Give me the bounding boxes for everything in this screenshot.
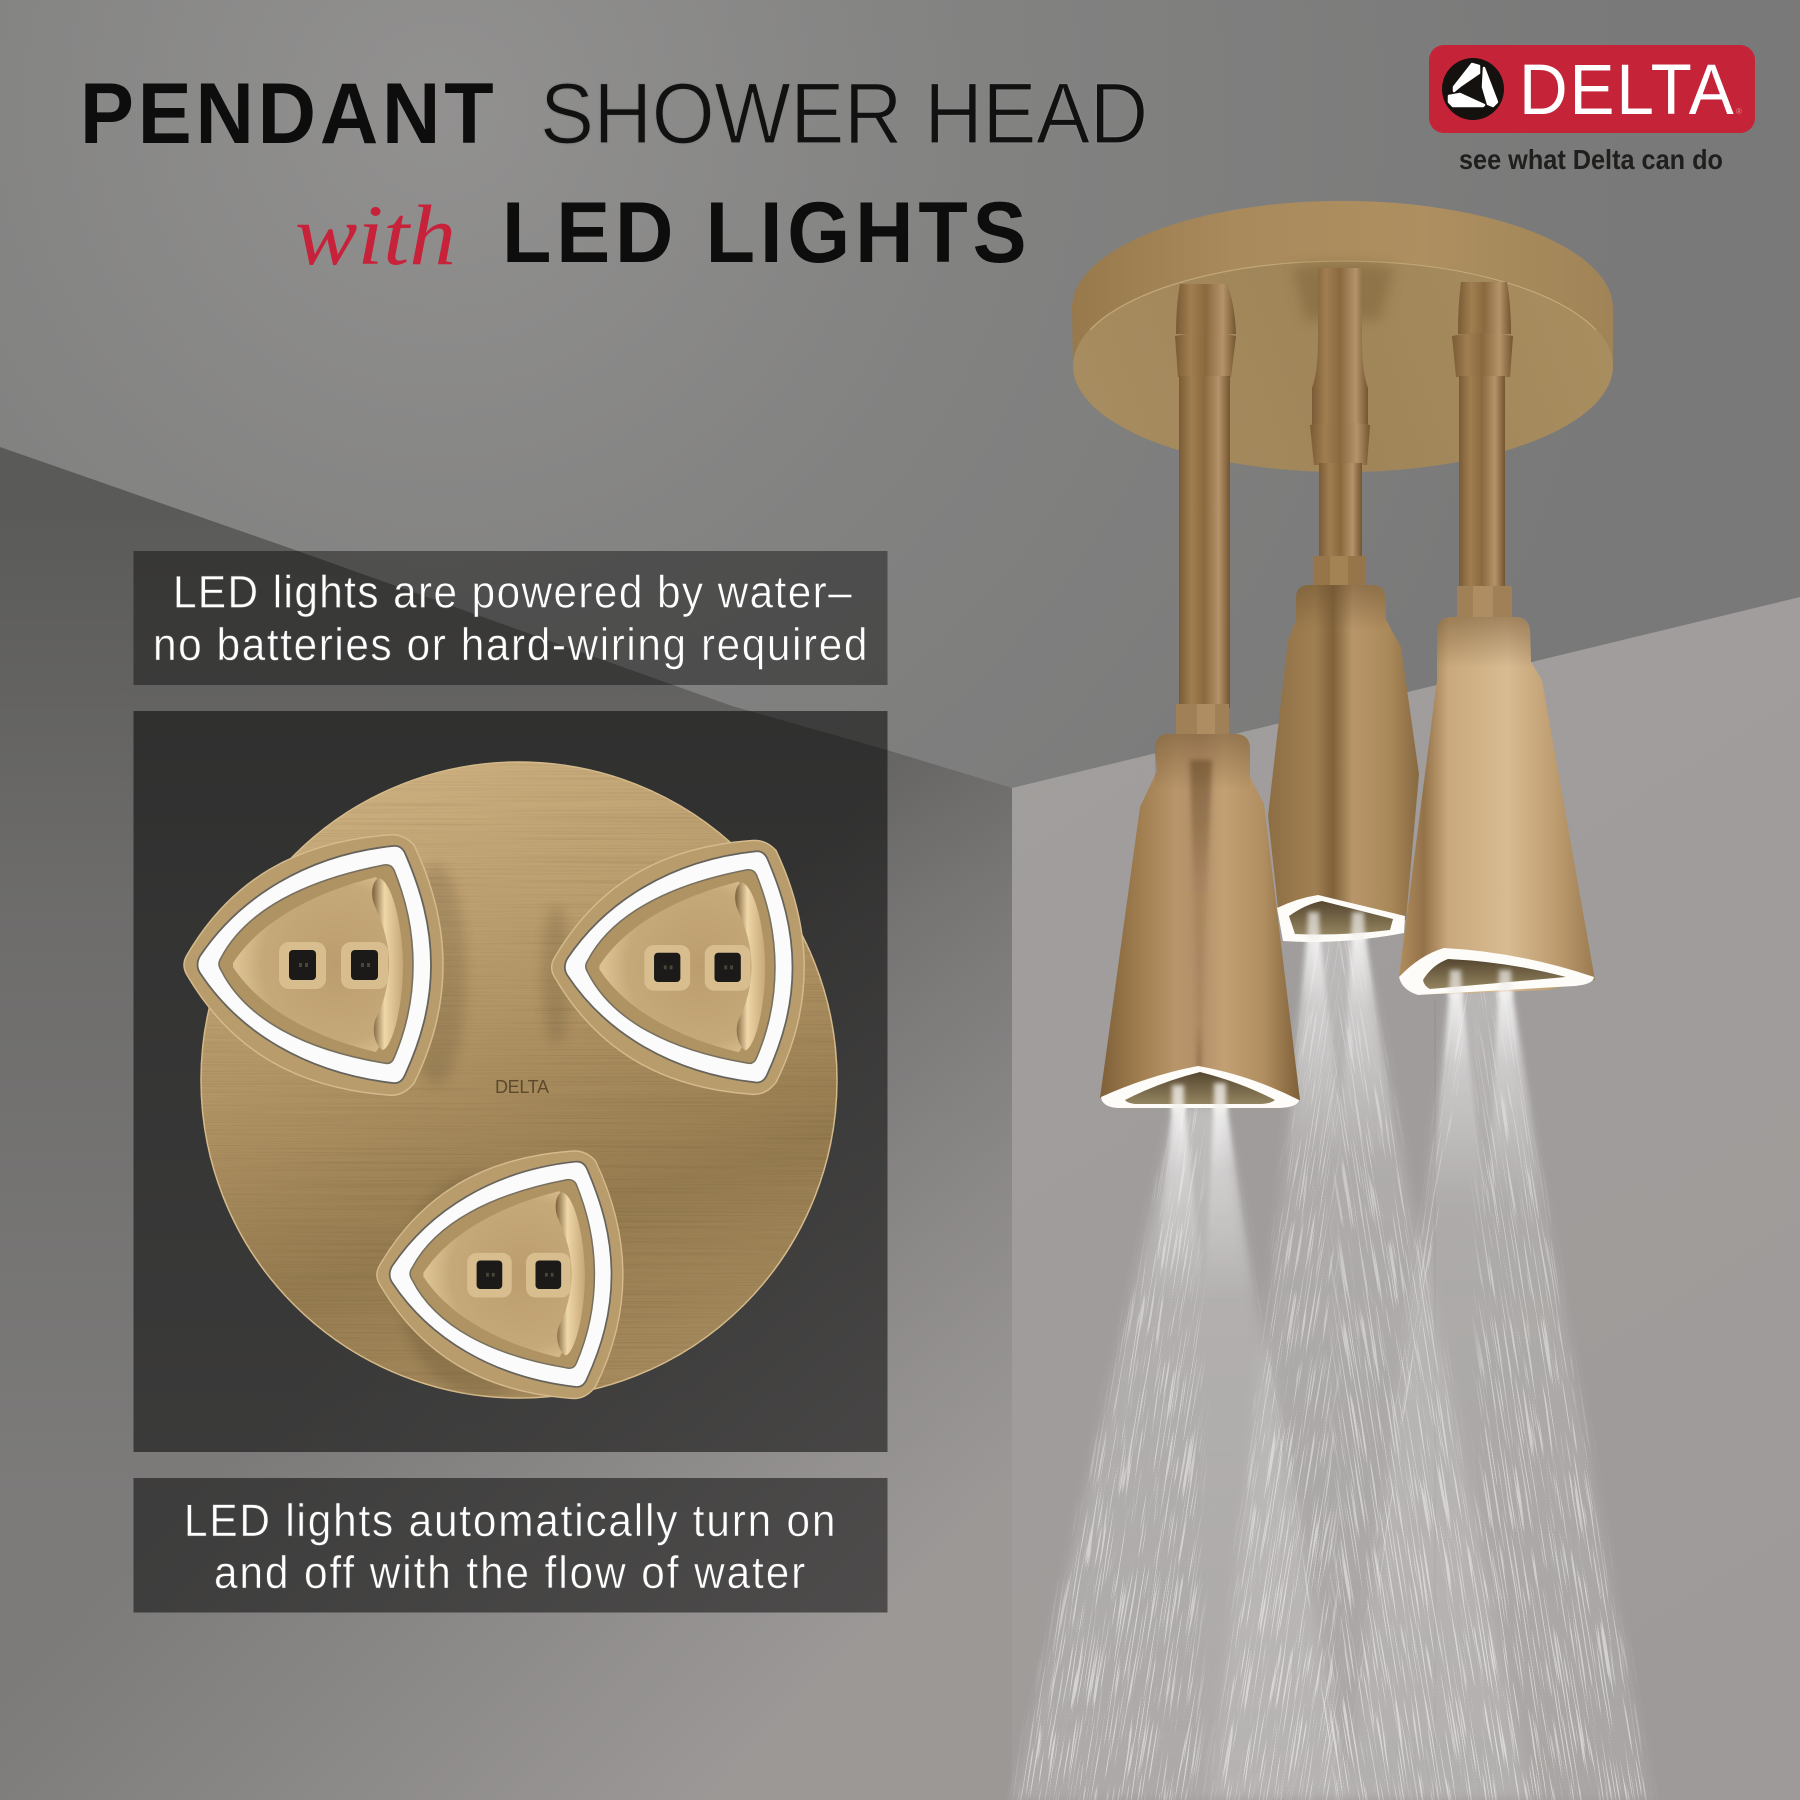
caption line 1: LED lights are powered by water– bbox=[173, 567, 852, 618]
nozzle jets over lens bbox=[1172, 912, 1512, 1112]
shadows under triangles bbox=[400, 865, 570, 1395]
logo tagline: see what Delta can do bbox=[1459, 144, 1723, 175]
title word: with: with bbox=[295, 187, 456, 283]
plate brand mark: DELTA bbox=[495, 1077, 549, 1097]
title bbox=[80, 65, 1148, 283]
caption line 2: no batteries or hard-wiring required bbox=[153, 620, 867, 670]
caption line 2: and off with the flow of water bbox=[214, 1548, 805, 1598]
left head LED ring bbox=[1101, 1066, 1299, 1108]
back pendant arm bbox=[1310, 268, 1370, 585]
back head LED ring bbox=[1277, 895, 1405, 942]
right pendant arm bbox=[1452, 282, 1513, 617]
round brushed plate bbox=[200, 760, 840, 1400]
jets bbox=[1154, 925, 1546, 1300]
panel: LED close-up bbox=[134, 711, 888, 1452]
title words: SHOWER HEAD: SHOWER HEAD bbox=[540, 65, 1148, 162]
right wall bbox=[1012, 597, 1800, 1800]
ceiling mount plate bbox=[1072, 201, 1613, 472]
left pendant head bbox=[1100, 734, 1300, 1108]
caption box bbox=[134, 551, 888, 685]
caption line 1: LED lights automatically turn on bbox=[184, 1496, 835, 1546]
logo red badge bbox=[1429, 45, 1755, 133]
shower head product bbox=[1072, 201, 1613, 1112]
logo: Delta bbox=[1429, 45, 1755, 175]
left pendant arm bbox=[1175, 284, 1236, 735]
title words: LED LIGHTS: LED LIGHTS bbox=[502, 184, 1027, 281]
caption box bbox=[134, 1478, 888, 1612]
spray face: left bbox=[184, 835, 443, 1095]
left wall bbox=[0, 447, 1012, 1800]
right pendant head bbox=[1399, 617, 1595, 995]
soft fans of mist bbox=[1013, 930, 1650, 1800]
title word: PENDANT: PENDANT bbox=[80, 65, 494, 162]
registered mark: ® bbox=[1736, 107, 1742, 116]
water streaks leaning right bbox=[1254, 940, 1652, 1800]
back pendant head bbox=[1268, 585, 1419, 942]
caption: automatic on and off bbox=[134, 1478, 888, 1612]
logo wordmark: DELTA bbox=[1519, 49, 1734, 129]
spray face: bottom bbox=[377, 1151, 623, 1398]
caption: powered by water bbox=[134, 551, 888, 685]
right head LED ring bbox=[1399, 948, 1594, 995]
water streaks leaning left bbox=[1005, 900, 1487, 1800]
water spray bbox=[1005, 900, 1677, 1800]
spray face: right bbox=[552, 840, 804, 1094]
icon: Delta triangle mark bbox=[1442, 58, 1504, 120]
panel background bbox=[134, 711, 888, 1452]
